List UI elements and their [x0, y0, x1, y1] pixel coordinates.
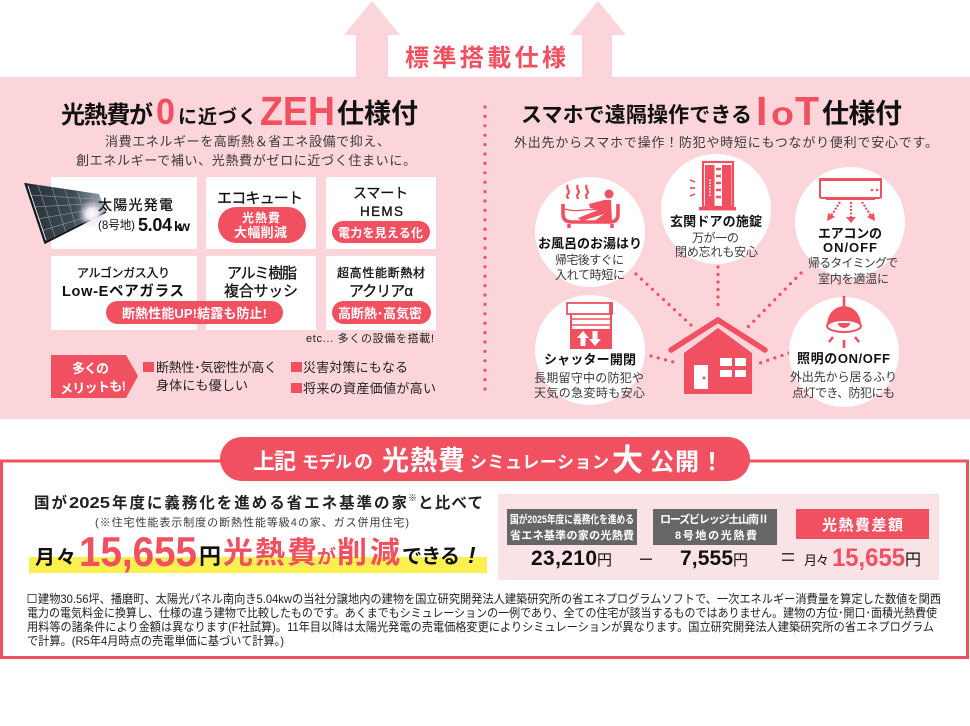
heading: IoT: I: [756, 88, 767, 134]
feature: air conditioner: 帰るタイミングで: [808, 256, 898, 270]
card: Aqua Foam insulation: 超高性能断熱材: [337, 265, 425, 280]
icon: pendant light: [827, 296, 861, 348]
heading: IoT: [521, 88, 902, 134]
card: solar power: 5.04: [138, 215, 172, 235]
label: standard house: 国が2025年度に義務化を進める: [510, 512, 634, 526]
feature: air conditioner: 室内を適温に: [818, 272, 889, 286]
card: smart HEMS: スマート: [353, 185, 408, 201]
label: standard house: 省エネ基準の家の光熱費: [510, 528, 634, 542]
label: Rose Village: 8号地の光熱費: [675, 528, 757, 542]
feature: air conditioner: エアコンの: [818, 226, 882, 241]
feature: air conditioner: ON/OFF: [823, 240, 877, 255]
card: Aqua Foam insulation: [326, 256, 436, 330]
ZEH description: [76, 134, 416, 168]
heading: ZEH: 光熱費が: [61, 101, 153, 129]
heading: IoT: o: [771, 95, 794, 132]
value: monthly saving: [804, 544, 921, 572]
comparison statement: [34, 493, 483, 529]
simulation heading: [220, 437, 750, 481]
comparison statement: 国が: [34, 493, 67, 512]
simulation heading: 公開！: [650, 449, 724, 476]
badge: many merits: メリットも!: [60, 378, 126, 397]
card: Low-E pair glass: アルゴンガス入り: [77, 265, 170, 280]
icon: air conditioner: [819, 178, 882, 223]
ZEH description: 創エネルギーで補い、光熱費がゼロに近づく住まいに。: [76, 153, 416, 168]
icon: door: [690, 162, 736, 210]
feature: door lock: 閉め忘れも安心: [675, 245, 758, 259]
pill: insulation performance: [106, 301, 283, 324]
savings headline: できる: [402, 545, 460, 568]
value: monthly saving: 月々: [804, 553, 829, 568]
footnote: [27, 591, 941, 648]
feature: door lock: [661, 154, 771, 264]
comparison statement: 年度に義務化を進める省エネ基準の家: [112, 493, 407, 512]
value: standard house: 23,210: [531, 547, 597, 570]
savings headline: 光熱費: [223, 537, 317, 570]
card: aluminium resin sash: [206, 256, 316, 330]
simulation heading: シミュレーション: [470, 453, 609, 472]
feature: shutter: 長期留守中の防犯や: [534, 370, 644, 385]
card: EcoCute: エコキュート: [217, 190, 303, 207]
centre dotted divider: [483, 107, 487, 391]
IoT description: 外出先からスマホで操作！防犯や時短にもつながり便利で安心です。: [514, 135, 938, 150]
comparison statement: 2025: [69, 495, 110, 512]
comparison statement: (※住宅性能表示制度の断熱性能等級4の家、ガス併用住宅): [95, 515, 409, 529]
card: aluminium resin sash: アルミ樹脂: [227, 265, 297, 282]
heading: ZEH: に近づく: [178, 106, 257, 128]
card: smart HEMS: HEMS: [360, 204, 403, 219]
simulation heading: 上記: [253, 449, 296, 474]
savings headline: [29, 528, 487, 575]
savings headline: 月々: [35, 547, 76, 569]
badge: many merits: 多くの: [72, 361, 109, 376]
feature: lighting: 点灯でき、防犯にも: [792, 385, 895, 400]
card: solar power: (8号地): [98, 218, 135, 232]
top arrows: [344, 1, 626, 78]
equals sign: [782, 554, 794, 560]
heading: ZEH: ZEH: [260, 88, 335, 134]
card: aluminium resin sash: 複合サッシ: [224, 283, 298, 300]
feature: shutter: [534, 295, 645, 405]
card: EcoCute: 光熱費: [242, 210, 280, 225]
heading: ZEH: [61, 88, 418, 134]
icon: house: [671, 320, 765, 394]
card: smart HEMS: 電力を見える化: [338, 225, 423, 240]
feature: lighting: [789, 296, 899, 407]
feature: lighting: 外出先から居るふり: [790, 370, 897, 384]
feature: bath: 帰宅後すぐに: [555, 253, 624, 267]
feature: bath: [535, 177, 645, 287]
value: monthly saving: 円: [905, 552, 921, 569]
comparison statement: ※: [408, 493, 417, 503]
heading: ZEH: 仕様付: [337, 99, 418, 129]
merit list: 災害対策にもなる: [303, 360, 408, 375]
ZEH description: 消費エネルギーを高断熱＆省エネ設備で抑え、: [105, 134, 390, 149]
pill: insulation performance: 断熱性能UP!結露も防止!: [122, 306, 267, 321]
heading: IoT: スマホで遠隔操作できる: [521, 104, 752, 127]
label: standard house: [507, 509, 637, 545]
feature: air conditioner: [795, 167, 905, 286]
title: standard equipment: 標準搭載仕様: [405, 45, 566, 72]
card: Low-E pair glass: [51, 256, 197, 330]
label: Rose Village: ローズビレッジ土山南Ⅱ: [660, 512, 769, 526]
cost comparison table: [498, 494, 939, 580]
icon: shutter: [567, 302, 613, 348]
value: monthly saving: 15,655: [832, 544, 905, 572]
feature: shutter: シャッター開閉: [544, 352, 636, 367]
savings headline: !: [468, 542, 476, 568]
merit list: [143, 360, 436, 396]
feature: lighting: 照明のON/OFF: [797, 351, 890, 366]
minus sign: [640, 558, 652, 560]
simulation heading: 光熱費: [382, 446, 465, 476]
icon: bath: [563, 185, 618, 228]
value: standard house: 円: [597, 552, 612, 569]
heading: IoT: 仕様付: [822, 99, 902, 129]
savings headline: 15,655: [79, 528, 197, 575]
card: EcoCute: 大幅削減: [234, 225, 287, 240]
merit list: 身体にも優しい: [156, 378, 248, 393]
feature: door lock: 万が一の: [692, 230, 739, 245]
simulation heading: モデル: [302, 452, 352, 472]
card: solar power: kw: [174, 218, 190, 234]
merit list: 断熱性･気密性が高く: [156, 360, 277, 375]
pink specification panel: [0, 77, 970, 419]
value: Rose Village: 7,555: [680, 547, 733, 570]
simulation heading: の: [354, 452, 373, 473]
card: Aqua Foam insulation: アクリアα: [349, 283, 413, 300]
merit list: 将来の資産価値が高い: [303, 381, 436, 396]
card: Aqua Foam insulation: 高断熱･高気密: [338, 306, 422, 321]
card: smart HEMS: [326, 177, 436, 249]
footnote: で計算。(R5年4月時点の売電単価に基づいて計算。): [27, 633, 284, 648]
simulation frame: [2, 461, 968, 658]
comparison statement: と比べて: [418, 494, 483, 512]
heading: ZEH: 0: [156, 91, 175, 132]
note: many facilities: etc... 多くの設備を搭載!: [306, 331, 434, 345]
heading: IoT: T: [795, 88, 819, 134]
feature: bath: 入れて時短に: [555, 268, 625, 282]
card: EcoCute: [206, 177, 316, 249]
savings headline: 削減: [337, 537, 400, 570]
card: solar power: 太陽光発電: [98, 197, 173, 213]
label: cost difference: [796, 509, 929, 539]
savings headline: が: [317, 545, 336, 568]
label: cost difference: 光熱費差額: [822, 516, 903, 534]
title: standard equipment: [388, 35, 582, 77]
card: solar power: [25, 177, 197, 249]
icon: solar panel: [25, 183, 107, 243]
feature: shutter: 天気の急変時も安心: [534, 385, 645, 400]
savings headline: 円: [199, 544, 221, 569]
value: Rose Village: 円: [733, 552, 748, 569]
feature: door lock: 玄関ドアの施錠: [670, 214, 762, 229]
simulation heading: 大: [612, 443, 643, 478]
dotted connectors: [636, 267, 801, 363]
label: Rose Village: [653, 509, 777, 545]
badge: many merits: [51, 355, 138, 398]
feature: bath: お風呂のお湯はり: [538, 236, 642, 251]
card: Low-E pair glass: Low-Eペアガラス: [62, 283, 184, 300]
